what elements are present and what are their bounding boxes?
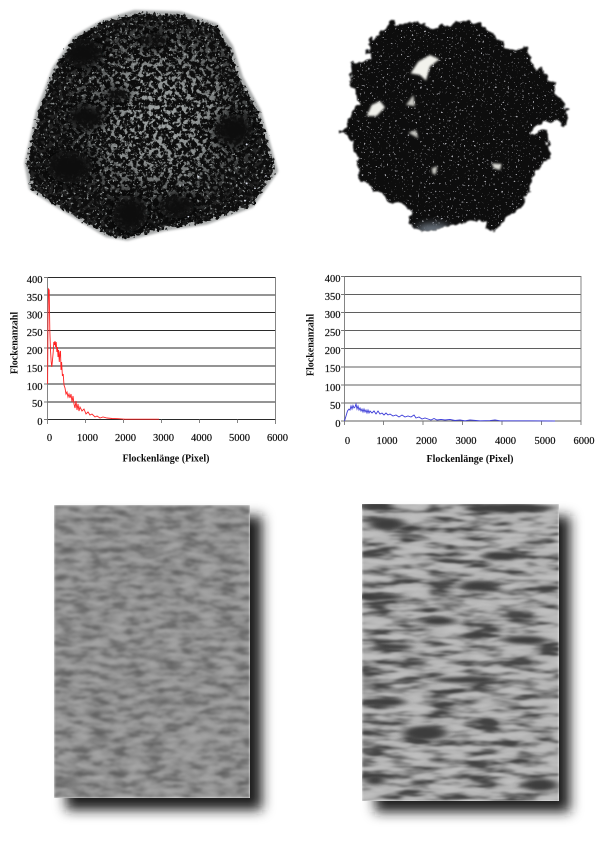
x axis tick labels: 0 [345, 436, 350, 447]
x axis tick labels: 4000 [191, 433, 212, 444]
x axis tick labels [345, 436, 594, 447]
photo: dense flock sample [338, 18, 570, 233]
blue data curve [344, 404, 555, 421]
y axis tick labels: 0 [335, 419, 340, 430]
y axis title: Flockenanzahl [306, 314, 316, 376]
x axis tick labels: 6000 [267, 433, 288, 444]
x axis tick labels: 1000 [77, 433, 98, 444]
x axis title: Flockenlänge (Pixel) [123, 454, 209, 464]
x axis tick labels: 1000 [376, 436, 398, 447]
x axis tick labels: 4000 [495, 436, 516, 447]
photo: sparse flock sample [20, 10, 287, 250]
y axis tick labels: 50 [32, 399, 42, 410]
y axis tick labels: 300 [325, 310, 340, 321]
x axis tick labels: 3000 [456, 436, 476, 447]
x axis tick labels: 5000 [229, 433, 250, 444]
y axis tick labels: 350 [27, 293, 42, 304]
x axis tick labels: 6000 [574, 436, 594, 447]
y axis tick labels: 50 [330, 401, 340, 412]
chart: blue flock length distribution [306, 274, 594, 465]
x axis tick labels: 2000 [115, 433, 136, 444]
y axis tick labels: 0 [37, 417, 42, 428]
y axis tick labels: 400 [325, 274, 340, 285]
red data curve [48, 289, 159, 419]
y axis tick labels: 100 [325, 383, 340, 394]
y axis tick labels: 150 [27, 364, 42, 375]
x axis tick labels: 0 [47, 433, 52, 444]
y axis tick labels: 300 [27, 310, 42, 322]
y axis title: Flockenanzahl [10, 312, 20, 374]
x axis tick labels: 5000 [534, 436, 556, 447]
x axis tick labels: 3000 [153, 433, 174, 444]
y axis tick labels [27, 275, 42, 428]
y axis tick labels: 250 [325, 328, 340, 339]
y axis tick labels: 350 [325, 292, 340, 303]
photo: high contrast flock texture with shadow [357, 503, 570, 812]
y axis tick labels: 250 [27, 328, 42, 339]
y axis tick labels: 200 [325, 346, 340, 357]
y axis tick labels: 200 [27, 346, 42, 357]
y axis tick labels: 400 [27, 275, 42, 286]
y axis tick labels [325, 274, 340, 430]
x axis tick labels: 2000 [416, 436, 437, 447]
photo: low contrast flock texture with shadow [54, 505, 262, 810]
x axis title: Flockenlänge (Pixel) [427, 454, 513, 465]
chart: red flock length distribution [10, 275, 288, 464]
y axis tick labels: 100 [27, 382, 42, 393]
x axis tick labels [47, 433, 288, 444]
y axis tick labels: 150 [325, 364, 340, 375]
